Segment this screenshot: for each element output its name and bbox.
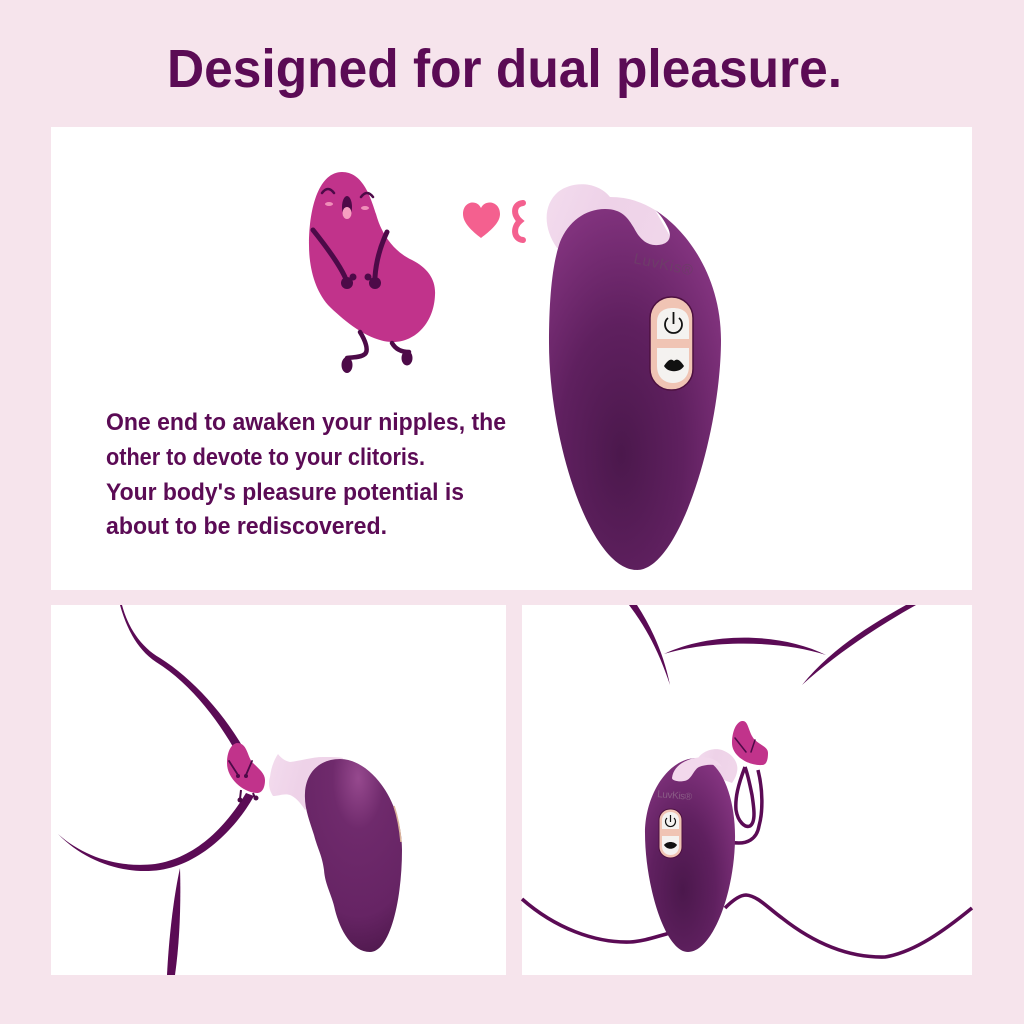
product: main device [547,184,721,570]
product: device in use: LuvKis® [657,789,693,803]
text block: description: other to devote to your clitoris. [106,444,425,471]
product: main device: LuvKis® [632,250,694,279]
text block: description: Your body's pleasure potential is [106,479,464,506]
character: small bean mascot [732,721,768,765]
character: small bean mascot [227,743,265,802]
line art: body outline [58,605,254,975]
text block: description: about to be rediscovered. [106,513,387,540]
icon: vibration waves [515,203,523,240]
title: Designed for dual pleasure. [167,39,842,99]
text block: description: One end to awaken your nipples, the [106,409,506,436]
panel: top product panel [51,127,972,590]
text block: description [106,409,506,540]
loops: mascot legs [730,767,762,843]
product: device in use [645,749,737,952]
panel: bottom right scene [522,605,972,975]
panel: bottom left scene [51,605,506,975]
icon: heart [463,202,500,238]
product: device side view [269,754,402,952]
line art: body outline [522,605,972,957]
character: bean mascot [309,172,435,373]
